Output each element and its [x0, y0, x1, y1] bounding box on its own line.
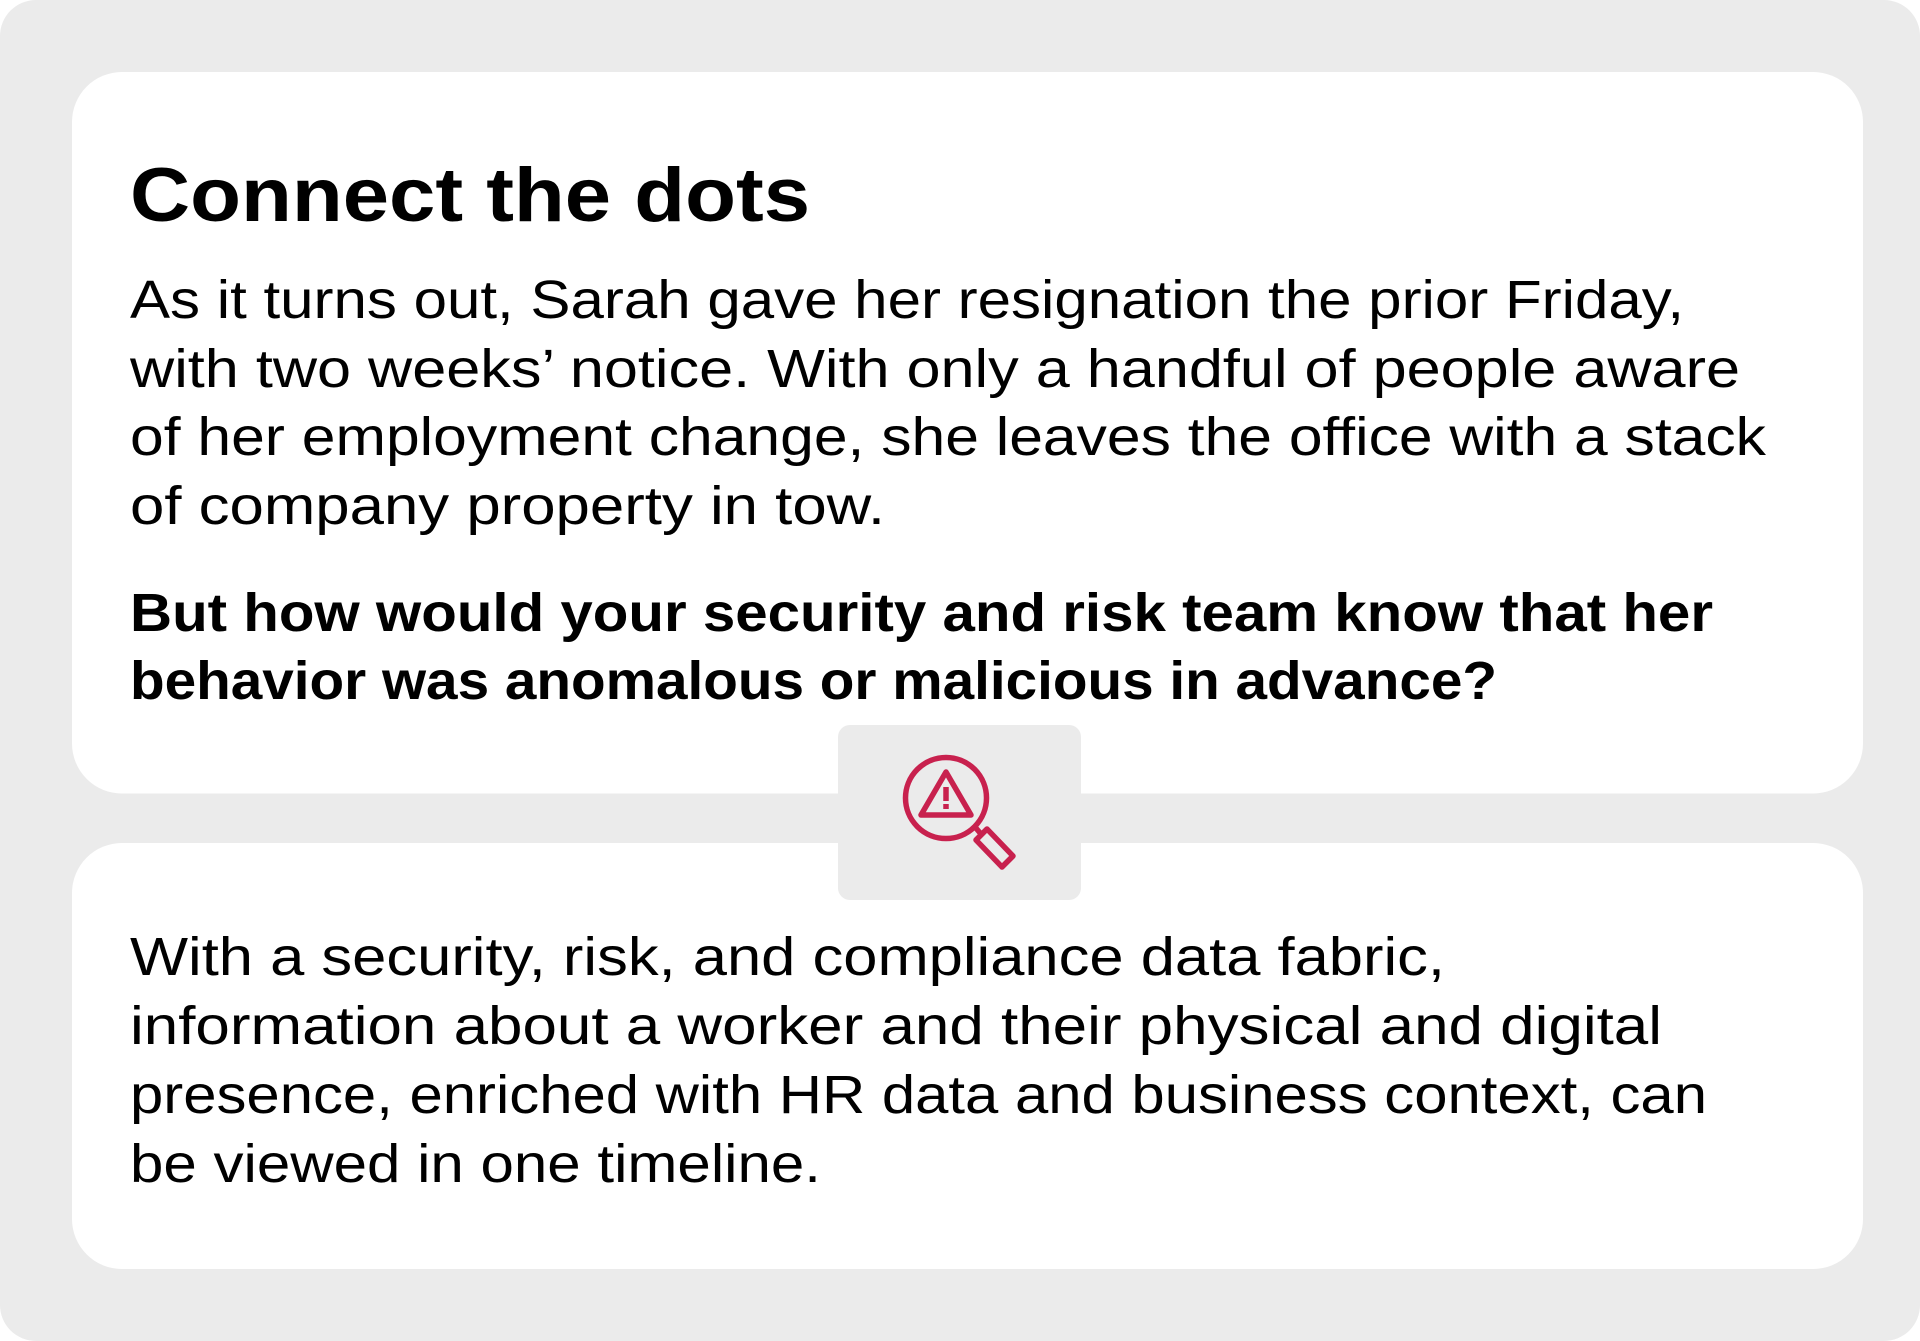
heading: Connect the dots: Connect the dots: [130, 153, 810, 238]
text block: Sarah's resignation story: of her employment change, she leaves the office with a stack: [130, 407, 1767, 467]
panel: security data fabric: [72, 843, 1863, 1269]
text block: bold question: [130, 583, 1713, 711]
text block: Sarah's resignation story: [129, 270, 1767, 536]
panel: connect the dots story: [72, 72, 1863, 794]
text block: data fabric explanation: information about a worker and their physical and digital: [130, 996, 1662, 1056]
text block: data fabric explanation: presence, enriched with HR data and business context, can: [130, 1065, 1707, 1125]
text block: Sarah's resignation story: with two weeks’ notice. With only a handful of people aware: [129, 339, 1740, 399]
text block: bold question: behavior was anomalous or malicious in advance?: [130, 651, 1497, 711]
text block: Sarah's resignation story: of company property in tow.: [130, 476, 885, 536]
icon tile connecting the panels: [838, 725, 1081, 900]
text block: bold question: But how would your security and risk team know that her: [130, 583, 1713, 643]
icon: magnifying glass with warning triangle: [906, 758, 1013, 867]
text block: data fabric explanation: be viewed in one timeline.: [130, 1134, 821, 1194]
text block: Sarah's resignation story: As it turns out, Sarah gave her resignation the prior Friday,: [130, 270, 1684, 330]
text block: data fabric explanation: [130, 927, 1707, 1194]
text block: data fabric explanation: With a security, risk, and compliance data fabric,: [130, 927, 1445, 987]
